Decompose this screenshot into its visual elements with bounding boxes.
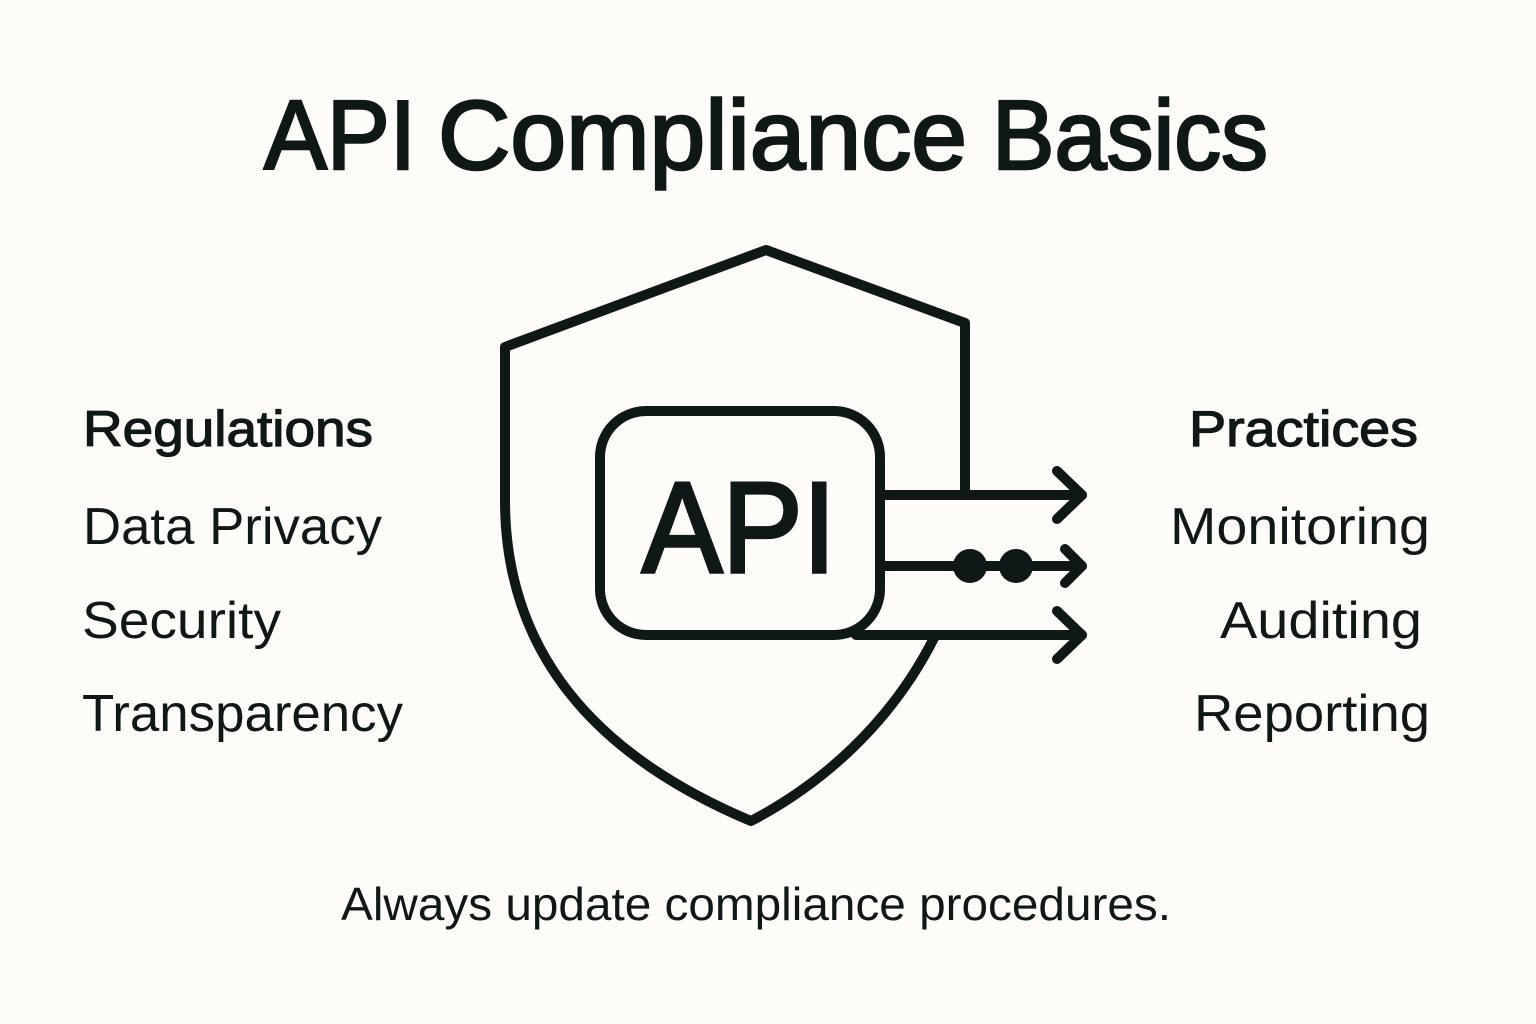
title: Compliance [438, 80, 967, 190]
icon: shield with api box and arrows [505, 250, 1082, 821]
heading: regulations: Regulations [83, 401, 373, 457]
api label: API [642, 456, 836, 600]
title: Basics [992, 80, 1268, 190]
panel: practices [1170, 401, 1430, 743]
heading: practices: Practices [1189, 401, 1418, 457]
footer note: Always update compliance procedures. [341, 878, 1171, 930]
item: auditing: Auditing [1220, 592, 1422, 650]
api box [600, 411, 880, 635]
arrow: top [884, 471, 1082, 519]
item: monitoring: Monitoring [1170, 498, 1430, 556]
arrow: middle with dots [884, 549, 1082, 583]
panel: regulations [82, 401, 403, 743]
item: security: Security [82, 592, 281, 650]
item: reporting: Reporting [1194, 685, 1430, 743]
title: API [264, 80, 416, 190]
item: transparency: Transparency [82, 685, 403, 743]
shield outline [505, 250, 965, 821]
item: data privacy: Data Privacy [83, 498, 382, 556]
arrow: bottom [856, 611, 1082, 659]
